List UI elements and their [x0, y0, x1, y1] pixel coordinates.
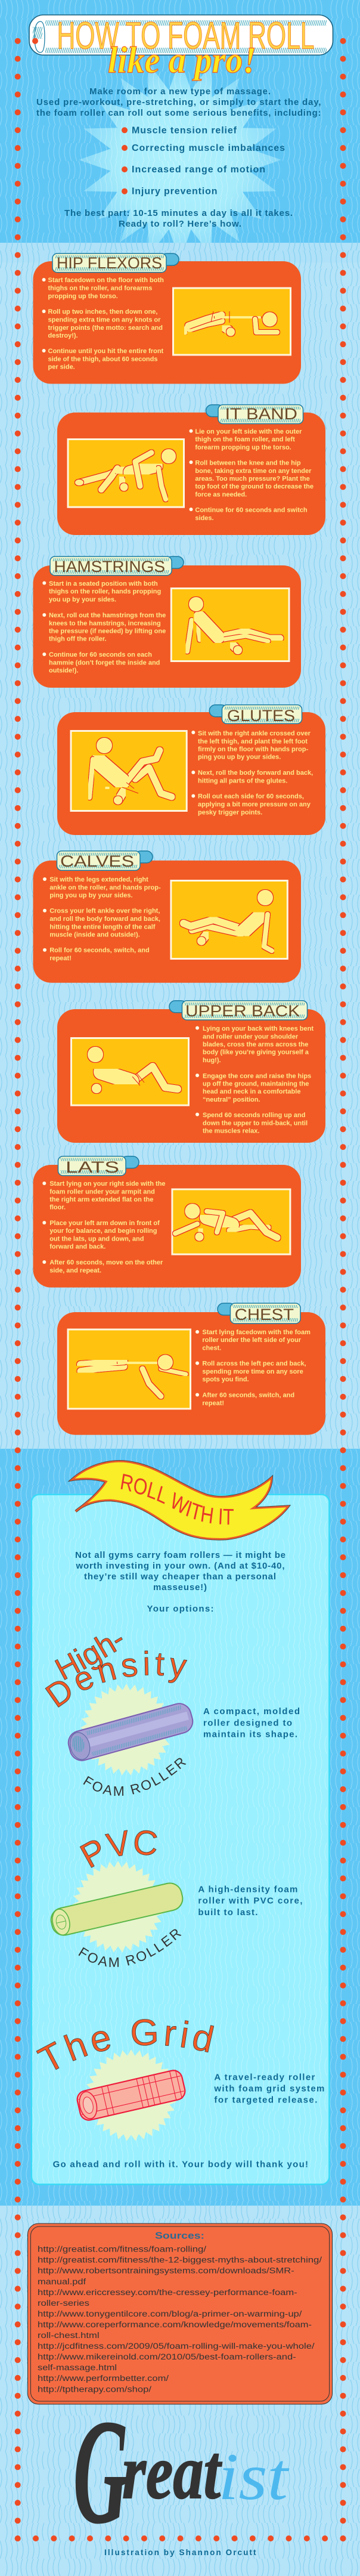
sunburst	[72, 1846, 178, 1959]
steps: firmly on the floor with hands prop-	[198, 746, 308, 753]
steps: hitting the entire length of the calf	[49, 923, 156, 930]
steps	[42, 1180, 166, 1274]
steps: blades, cross the arms across the	[203, 1041, 308, 1048]
steps: Cross your left ankle over the right,	[49, 908, 160, 915]
wave pattern on exercises section	[0, 243, 360, 1449]
sunburst	[85, 2034, 191, 2148]
steps: foam roller under your armpit and	[49, 1188, 155, 1195]
steps: thigh on the foam roller, and left	[195, 436, 295, 443]
heading: high-density: High-	[55, 1637, 123, 1680]
intro closing text: The best part: 10-15 minutes a day is all it takes.	[64, 208, 293, 218]
steps: hug!).	[203, 1057, 221, 1064]
source list: http://jcdfitness.com/2009/05/foam-rolling-will-make-you-whole/	[38, 2342, 315, 2351]
logo: Greatist: G	[73, 2389, 128, 2555]
steps: areas. Too much pressure? Plant the	[195, 475, 310, 483]
label: foam roller: FOAM ROLLER	[79, 1929, 181, 1967]
steps: sides.	[195, 515, 214, 522]
steps: thigh off the roller.	[49, 635, 107, 642]
benefits list: Increased range of motion	[132, 165, 265, 175]
intro closing text	[64, 208, 293, 229]
steps: Roll out each side for 60 seconds,	[198, 793, 304, 800]
steps: up off the ground, maintaining the	[203, 1080, 309, 1087]
steps: body (like you’re giving yourself a	[203, 1049, 309, 1056]
illustration: upper back	[72, 1038, 188, 1105]
steps: the muscles relax.	[203, 1127, 259, 1134]
heading: IT band: IT BAND	[225, 405, 297, 423]
steps: you up by your sides.	[49, 596, 116, 604]
steps: trigger points (the motto: search and	[48, 324, 163, 332]
roll with it intro	[75, 1550, 285, 1614]
source list: http://greatist.com/fitness/foam-rolling/	[38, 2245, 206, 2254]
steps: Lying on your back with knees bent	[203, 1025, 314, 1032]
steps: repeat!	[202, 1400, 224, 1407]
steps: Continue for 60 seconds and switch	[195, 507, 308, 514]
intro text	[36, 86, 321, 118]
panel: glutes	[57, 705, 325, 835]
source list: http://www.robertsontrainingsystems.com/downloads/SMR-	[38, 2266, 294, 2275]
heading: IT band	[206, 405, 303, 423]
steps: spending more time on any sore	[202, 1368, 303, 1375]
steps: the left thigh, and plant the left foot	[198, 738, 308, 745]
steps: Continue for 60 seconds on each	[49, 651, 152, 658]
steps: propping up the torso.	[48, 293, 118, 300]
steps: out the lats, up and down, and	[49, 1235, 144, 1242]
steps	[195, 1329, 311, 1407]
credit: Illustration by Shannon Orcutt	[104, 2548, 256, 2557]
steps: spending extra time on any knots or	[48, 316, 161, 323]
wave pattern on blue areas	[0, 0, 360, 243]
steps	[191, 730, 313, 816]
steps: Engage the core and raise the hips	[203, 1072, 311, 1080]
source list: manual.pdf	[38, 2277, 86, 2286]
heading: high-density: Density	[45, 1651, 187, 1708]
steps: After 60 seconds, switch, and	[202, 1392, 294, 1399]
steps: forearm propping up the torso.	[195, 444, 291, 451]
steps: Start in a seated position with both	[49, 580, 158, 587]
description	[203, 1706, 300, 1740]
steps: down the upper to mid-back, until	[203, 1120, 308, 1127]
steps: chest.	[202, 1344, 221, 1352]
source list: http://www.coreperformance.com/knowledge/movements/foam-	[38, 2320, 312, 2329]
steps: spots you find.	[202, 1376, 249, 1383]
roll with it intro: Your options:	[147, 1604, 213, 1614]
steps: muscle (inside and outside!).	[49, 931, 140, 938]
heading: glutes	[209, 705, 302, 725]
steps: Next, roll the body forward and back,	[198, 769, 313, 777]
steps: Continue until you hit the entire front	[48, 348, 164, 355]
source list: http://www.performbetter.com/	[38, 2374, 169, 2383]
steps: applying a bit more pressure on any	[198, 801, 311, 808]
steps: Sit with the legs extended, right	[49, 876, 148, 883]
heading: the grid: The Grid	[36, 2019, 215, 2070]
steps: head and neck in a comfortable	[203, 1088, 300, 1095]
description: A compact, molded	[203, 1706, 300, 1717]
steps: Next, roll out the hamstrings from the	[49, 612, 166, 619]
heading: lats	[58, 1156, 139, 1176]
panel: roll with it	[32, 1495, 329, 2184]
steps: roller under the left side of your	[202, 1337, 302, 1344]
heading: upper back: UPPER BACK	[185, 1002, 300, 1020]
description: with foam grid system	[213, 2084, 324, 2094]
wave pattern on sources section	[0, 2206, 360, 2576]
steps: floor.	[49, 1204, 66, 1211]
steps: destroy!).	[48, 332, 78, 339]
steps: ankle on the roller, and hands prop-	[49, 884, 161, 891]
steps: Start facedown on the floor with both	[48, 277, 164, 284]
source list	[38, 2245, 322, 2393]
source list: http://tptherapy.com/shop/	[38, 2385, 151, 2393]
steps: per side.	[48, 364, 75, 371]
description	[213, 2073, 324, 2105]
source list: self-massage.html	[38, 2363, 117, 2372]
logo: Greatist	[73, 2389, 290, 2555]
description: built to last.	[198, 1907, 257, 1918]
panel: lats	[33, 1156, 301, 1288]
steps: outside!).	[49, 667, 79, 674]
source list: http://www.tonygentilcore.com/blog/a-primer-on-warming-up/	[38, 2309, 302, 2318]
steps: ping you up by your sides.	[49, 892, 133, 899]
heading: chest: CHEST	[235, 1306, 294, 1323]
heading: chest	[218, 1303, 300, 1323]
steps: hammie (don’t forget the inside and	[49, 659, 160, 666]
steps: thighs on the roller, and forearms	[48, 285, 152, 292]
steps: pesky trigger points.	[198, 809, 262, 816]
closing line: Go ahead and roll with it. Your body will thank you!	[53, 2160, 308, 2170]
description: maintain its shape.	[203, 1730, 297, 1740]
steps: “neutral” position.	[203, 1096, 260, 1103]
benefits list	[122, 125, 285, 197]
roller: red grid	[76, 2068, 187, 2122]
roll with it intro: Not all gyms carry foam rollers — it might be	[75, 1550, 285, 1560]
option: high-density	[45, 1637, 300, 1796]
illustration: calves	[171, 880, 287, 959]
panel: IT band	[57, 405, 325, 535]
steps	[42, 277, 164, 371]
description: A high-density foam	[198, 1884, 297, 1894]
wave pattern on options section	[0, 1449, 360, 2206]
banner: roll with it: ROLL WITH IT	[120, 1473, 234, 1524]
description: roller designed to	[203, 1718, 292, 1728]
panel: sources	[27, 2224, 333, 2404]
steps: forward and back.	[49, 1244, 105, 1251]
banner: roll with it	[68, 1460, 291, 1541]
steps	[43, 876, 161, 962]
panel: chest	[57, 1303, 325, 1435]
steps: and roll the body forward and back,	[49, 916, 160, 923]
steps	[195, 1025, 314, 1134]
steps: Start lying on your right side with the	[49, 1180, 166, 1188]
steps: Place your left arm down in front of	[49, 1220, 160, 1227]
roller: purple	[66, 1701, 195, 1763]
steps: hitting all parts of the glutes.	[198, 777, 287, 784]
panel: calves	[33, 851, 301, 983]
roll with it intro: worth investing in your own. (And at $10-40,	[75, 1561, 284, 1571]
heading: sources: Sources:	[155, 2231, 204, 2241]
illustration: IT band	[68, 439, 184, 507]
steps: Start lying facedown with the foam	[202, 1329, 311, 1336]
benefits list: Injury prevention	[132, 187, 217, 197]
logo: Greatist: ist	[218, 2440, 290, 2514]
steps: repeat!	[49, 955, 72, 962]
intro text: Used pre-workout, pre-stretching, or simply to start the day,	[36, 97, 321, 107]
heading: calves	[57, 851, 153, 870]
steps: side, and repeat.	[49, 1267, 101, 1274]
description	[198, 1884, 302, 1918]
illustration: hamstrings	[171, 588, 289, 661]
steps: Sit with the right ankle crossed over	[198, 730, 311, 737]
steps: Roll for 60 seconds, switch, and	[49, 947, 150, 954]
illustration: glutes	[71, 731, 187, 811]
heading: calves: CALVES	[60, 852, 134, 870]
steps: the pressure (if needed) by lifting one	[49, 627, 166, 635]
steps: Lie on your left side with the outer	[195, 428, 302, 435]
steps: side of the thigh, about 60 seconds	[48, 355, 157, 363]
title: like a pro: like a pro!	[108, 41, 256, 81]
panel: hip flexors	[33, 253, 301, 384]
illustration: hip flexors	[173, 288, 291, 355]
option: the grid	[36, 2019, 324, 2141]
steps: Roll up two inches, then down one,	[48, 308, 157, 316]
label: foam roller: FOAM ROLLER	[83, 1758, 186, 1796]
steps: Roll across the left pec and back,	[202, 1360, 306, 1368]
panel: hamstrings	[33, 556, 301, 688]
benefits list: Muscle tension relief	[132, 125, 237, 136]
description: for targeted release.	[214, 2095, 317, 2105]
option: PVC	[50, 1830, 302, 1967]
intro text: the foam roller can roll out some serious benefits, including:	[36, 108, 321, 118]
heading: lats: LATS	[66, 1158, 119, 1176]
illustration: chest	[68, 1329, 191, 1409]
background: sources section	[0, 2206, 360, 2576]
steps: ping you up by your sides.	[198, 754, 281, 761]
steps: After 60 seconds, move on the other	[49, 1259, 163, 1266]
heading: hip flexors: HIP FLEXORS	[57, 254, 162, 272]
steps	[42, 580, 166, 674]
background: top of exercises section, solid	[0, 262, 360, 1449]
heading: upper back	[169, 1001, 308, 1020]
steps: the right arm extended flat on the	[49, 1196, 153, 1203]
intro text: Make room for a new type of massage.	[89, 86, 271, 97]
description: A travel-ready roller	[214, 2073, 315, 2083]
description: roller with PVC core,	[198, 1896, 302, 1906]
roller: green	[49, 1881, 185, 1938]
heading: PVC: PVC	[80, 1830, 157, 1868]
steps: thighs on the roller, hands propping	[49, 588, 161, 595]
benefits list: Correcting muscle imbalances	[132, 143, 285, 153]
roll with it intro: masseuse!)	[153, 1582, 207, 1592]
steps: and roller under your shoulder	[203, 1033, 299, 1040]
steps: Spend 60 seconds rolling up and	[203, 1112, 305, 1119]
steps: Roll between the knee and the hip	[195, 459, 301, 466]
source list: http://www.ericcressey.com/the-cressey-performance-foam-	[38, 2288, 297, 2297]
heading: hamstrings: HAMSTRINGS	[54, 558, 165, 576]
intro closing text: Ready to roll? Here’s how.	[119, 219, 241, 229]
source list: http://www.mikereinold.com/2010/05/best-foam-rollers-and-	[38, 2352, 296, 2361]
source list: roller-series	[38, 2299, 89, 2308]
steps: top foot of the ground to decrease the	[195, 483, 314, 490]
steps: force as needed.	[195, 491, 247, 498]
starburst behind intro	[79, 58, 281, 261]
logo: Greatist: reat	[122, 2429, 222, 2515]
sunburst	[80, 1669, 187, 1782]
illustration: lats	[172, 1189, 290, 1254]
steps	[190, 428, 314, 522]
roll with it intro: they’re still way cheaper than a personal	[84, 1572, 276, 1582]
steps: knees to the hamstrings, increasing	[49, 620, 161, 627]
panel: upper back	[57, 1001, 325, 1143]
steps: bone, taking extra time on any tender	[195, 468, 312, 475]
heading: glutes: GLUTES	[227, 707, 295, 725]
background: exercises section	[0, 243, 360, 1449]
steps: your for balance, and begin rolling	[49, 1227, 157, 1235]
source list: http://greatist.com/fitness/the-12-biggest-myths-about-stretching/	[38, 2256, 322, 2265]
source list: roll-chest.html	[38, 2331, 100, 2340]
